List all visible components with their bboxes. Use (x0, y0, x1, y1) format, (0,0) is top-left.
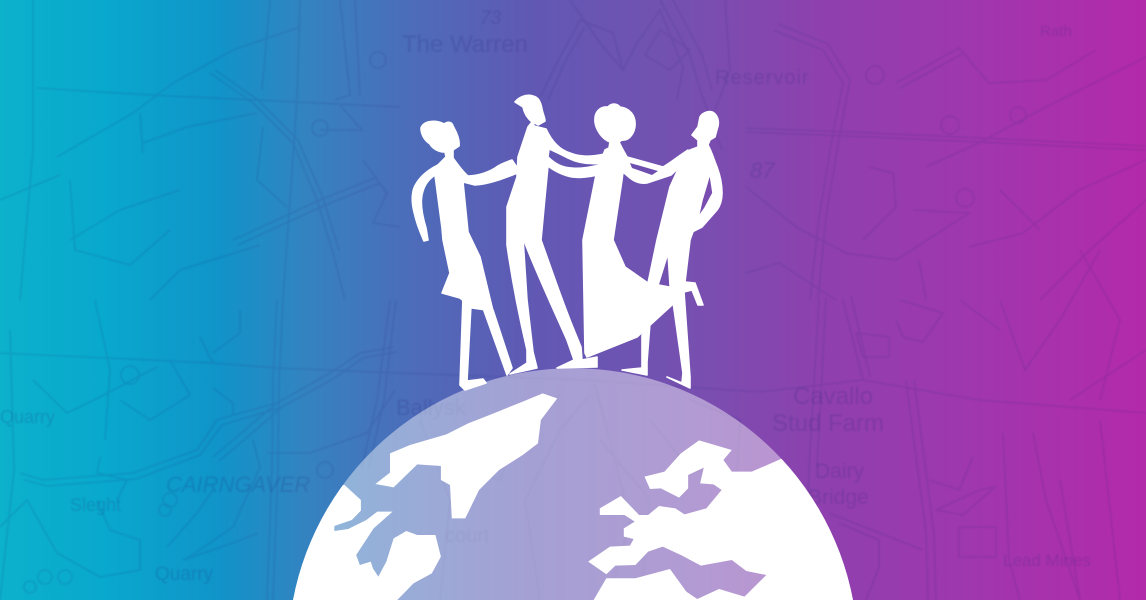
figure 4: man leaning back (622, 112, 722, 388)
map place names: Reservoir (715, 67, 810, 89)
map place names: Cavallo (793, 383, 873, 410)
map place names: Sleght (70, 495, 121, 515)
map place names: Stud Farm (772, 410, 884, 437)
land: north landmass (375, 393, 557, 518)
land: western landmass (290, 485, 441, 600)
globe disc (293, 368, 853, 600)
globe (290, 368, 872, 600)
map place names: Lead Mines (1003, 551, 1091, 570)
figure 1: woman with bun (412, 121, 520, 390)
map place names: Dairy (815, 460, 865, 483)
group of four figures (412, 95, 722, 390)
map place names: Quarry (0, 407, 55, 427)
map place names: CAIRNGAVER (166, 472, 310, 497)
figure 3: woman in long dress (583, 104, 689, 357)
land: eastern landmass (588, 440, 872, 600)
map place names: The Warren (402, 31, 528, 58)
map place names: Rath (1040, 23, 1072, 40)
map place names: Ballysk (396, 395, 467, 420)
map place names: Bridge (808, 486, 869, 509)
figure 2: tall man (507, 95, 605, 374)
continents (290, 393, 872, 600)
map place names: 73 (480, 8, 502, 29)
map place names: 87 (750, 158, 775, 183)
map place names: court (445, 525, 490, 547)
map place names: Quarry (155, 564, 214, 585)
